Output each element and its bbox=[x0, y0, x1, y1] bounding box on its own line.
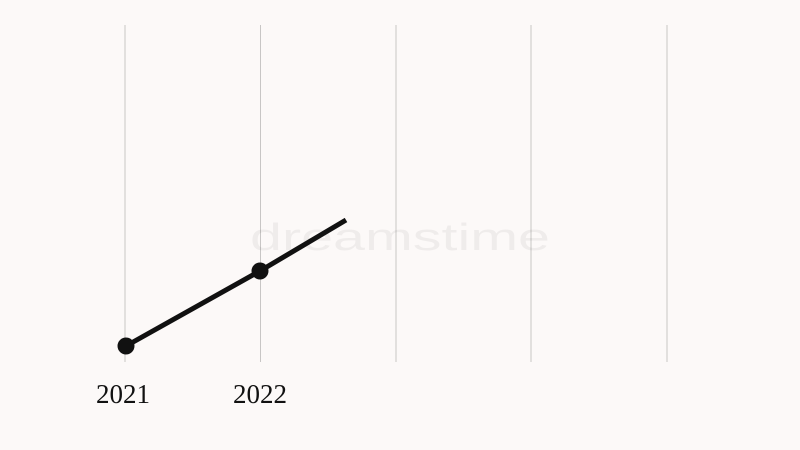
data line bbox=[118, 220, 346, 354]
x-axis labels: 2021 bbox=[96, 379, 150, 409]
data point 2022 bbox=[252, 262, 268, 280]
x-axis labels: 2022 bbox=[233, 379, 287, 409]
x-axis labels bbox=[96, 379, 287, 409]
watermark: dreamstime bbox=[250, 217, 550, 259]
data point 2021 bbox=[118, 338, 134, 354]
